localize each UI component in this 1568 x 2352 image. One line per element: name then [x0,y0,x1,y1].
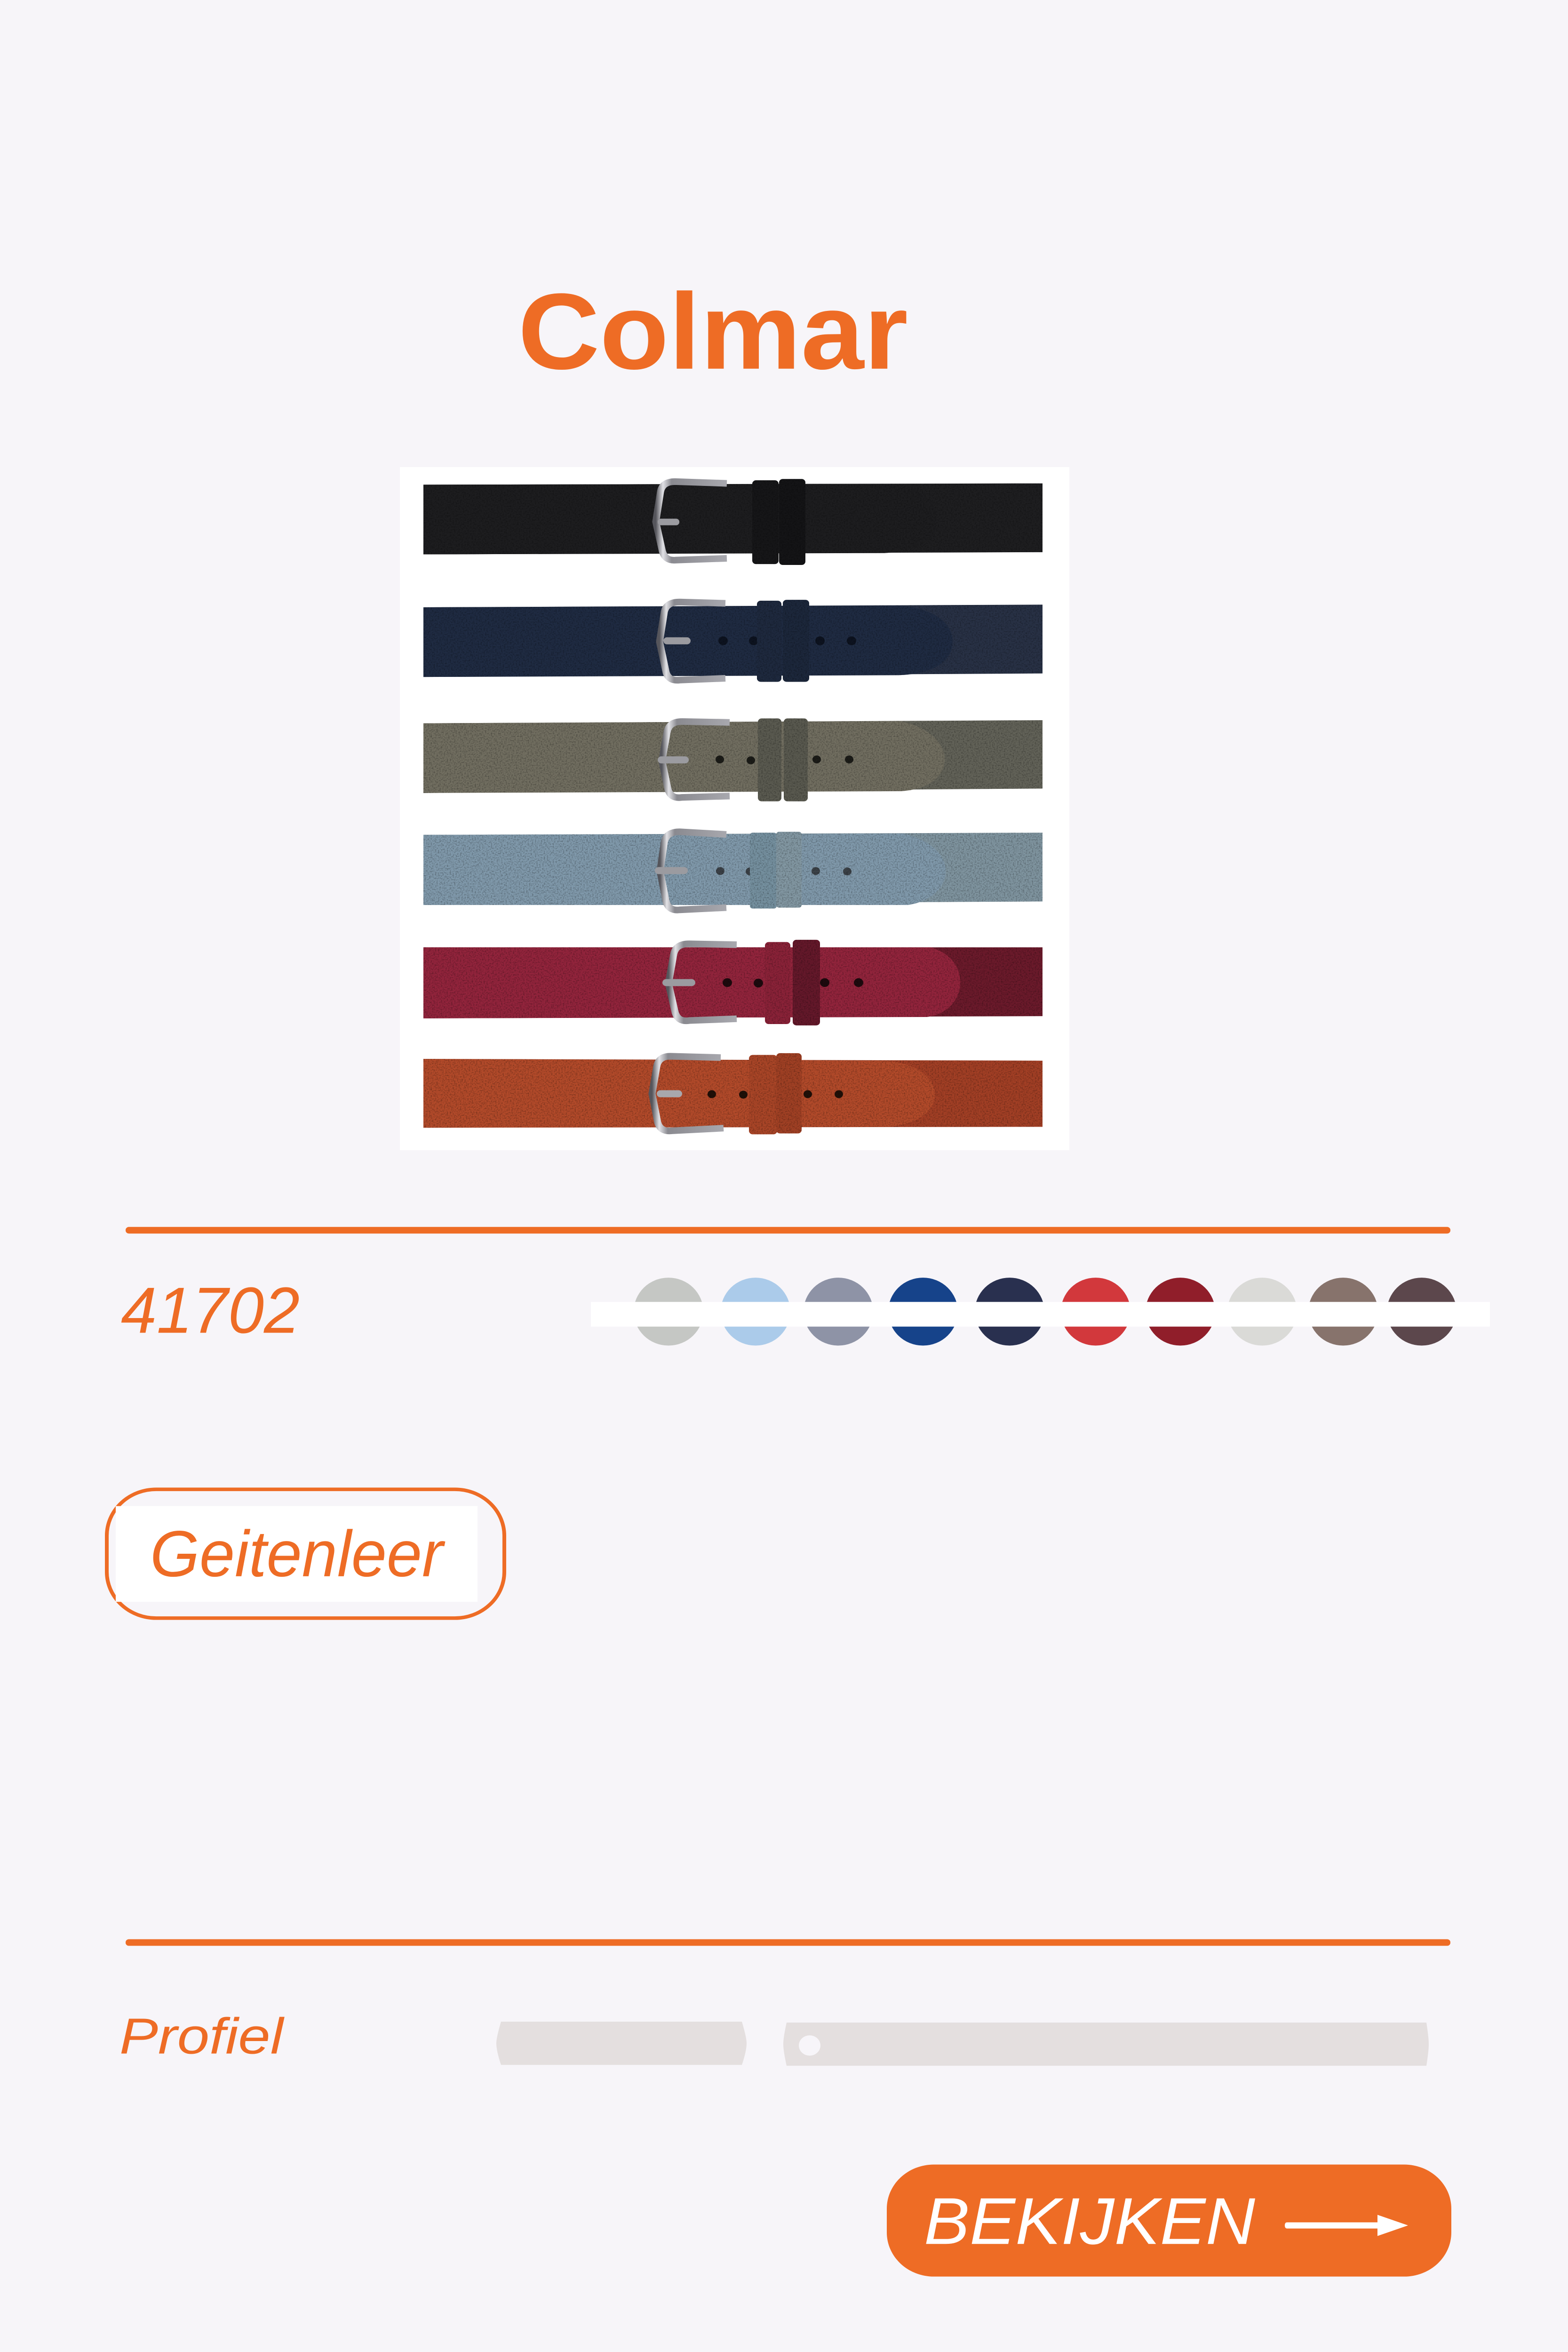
belt: black [423,479,1043,565]
belt: light blue [423,832,1043,910]
belt: rust red [423,1053,1043,1134]
profile bar: short [496,2022,747,2065]
profile bar: long [783,2023,1429,2066]
article number: 41702 [121,1274,300,1347]
belt: navy [423,600,1043,682]
divider: bottom [126,1939,1450,1946]
colour swatches [591,1278,1490,1345]
divider: top [126,1227,1450,1233]
button [887,2165,1451,2277]
profile label: Profiel [119,2008,285,2064]
button label: BEKIJKEN [924,2184,1256,2258]
title: Colmar [518,271,908,392]
material tag [107,1489,504,1618]
panel: belt photo [400,467,1069,1150]
belt: burgundy [423,940,1043,1025]
belt: taupe [423,718,1043,802]
arrow [1285,2215,1408,2236]
material label: Geitenleer [150,1518,446,1590]
